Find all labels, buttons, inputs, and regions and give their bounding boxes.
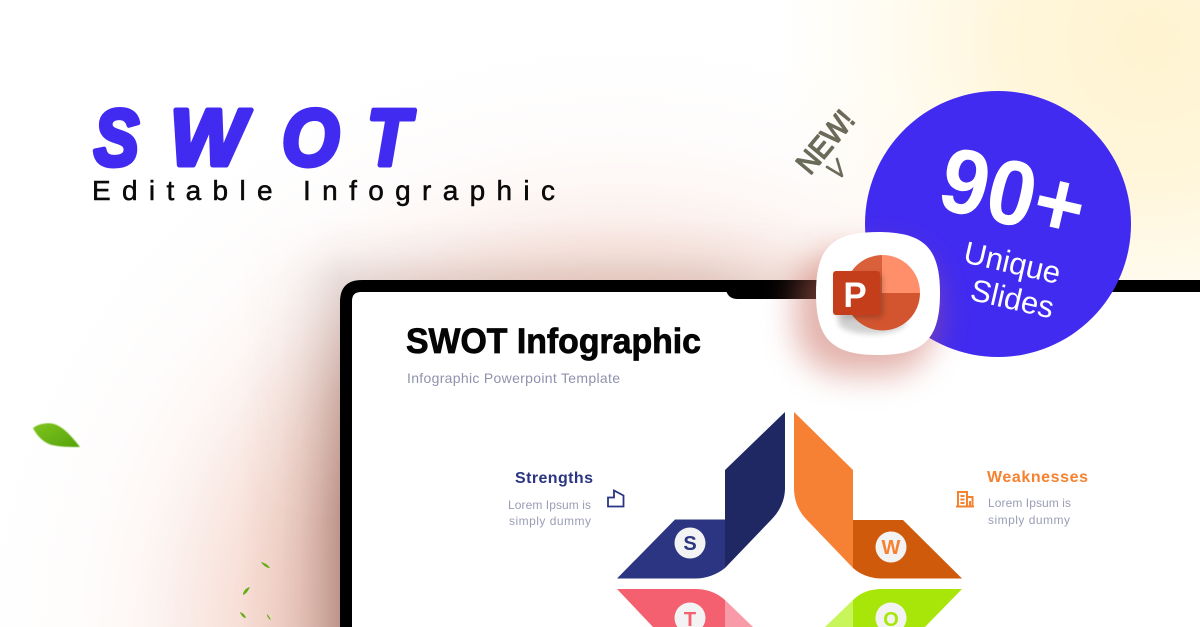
panel: W weaknesses petal: [794, 412, 962, 578]
icon: PowerPoint app tile: P: [843, 276, 867, 315]
panel: O opportunities petal: [825, 589, 962, 627]
icon: weaknesses: [956, 492, 974, 506]
icon: strengths: [608, 490, 624, 506]
title: SWOT: T: [367, 93, 416, 182]
text block: strengths: Strengths: [515, 470, 593, 487]
text block: weaknesses: [987, 469, 1088, 527]
badge: 90+ unique slides: Unique: [961, 235, 1064, 291]
badge: 90+ unique slides: 90+: [930, 128, 1096, 260]
text block: weaknesses: Weaknesses: [987, 469, 1088, 486]
panel: S strengths petal: S: [683, 533, 697, 555]
subtitle: Editable Infographic: Editable Infographic: [92, 175, 555, 206]
slide heading: SWOT Infographic: [406, 322, 701, 361]
icon: PowerPoint app tile: [795, 232, 940, 375]
text block: strengths: Lorem Ipsum is: [508, 498, 591, 512]
callout: NEW!: NEW!: [790, 104, 862, 180]
text block: strengths: simply dummy: [509, 514, 591, 528]
badge: 90+ unique slides: Slides: [967, 272, 1057, 325]
title: SWOT: S: [94, 92, 139, 182]
title: SWOT: W: [170, 93, 252, 182]
slide subheading: Infographic Powerpoint Template: [407, 370, 620, 386]
title: SWOT: [94, 92, 416, 183]
panel: T threats petal: [617, 589, 753, 627]
leaves: small green: [240, 562, 271, 620]
background glow: tablet shadow: [276, 250, 798, 627]
badge: 90+ unique slides: [865, 91, 1131, 357]
panel: W weaknesses petal: W: [882, 537, 901, 559]
title: SWOT: O: [282, 93, 339, 183]
text block: strengths: [508, 470, 593, 528]
leaf: large green: [33, 423, 80, 447]
tablet mockup: [340, 280, 1200, 627]
text block: weaknesses: simply dummy: [988, 513, 1070, 527]
text block: weaknesses: Lorem Ipsum is: [988, 496, 1071, 510]
panel: S strengths petal: [617, 412, 785, 578]
